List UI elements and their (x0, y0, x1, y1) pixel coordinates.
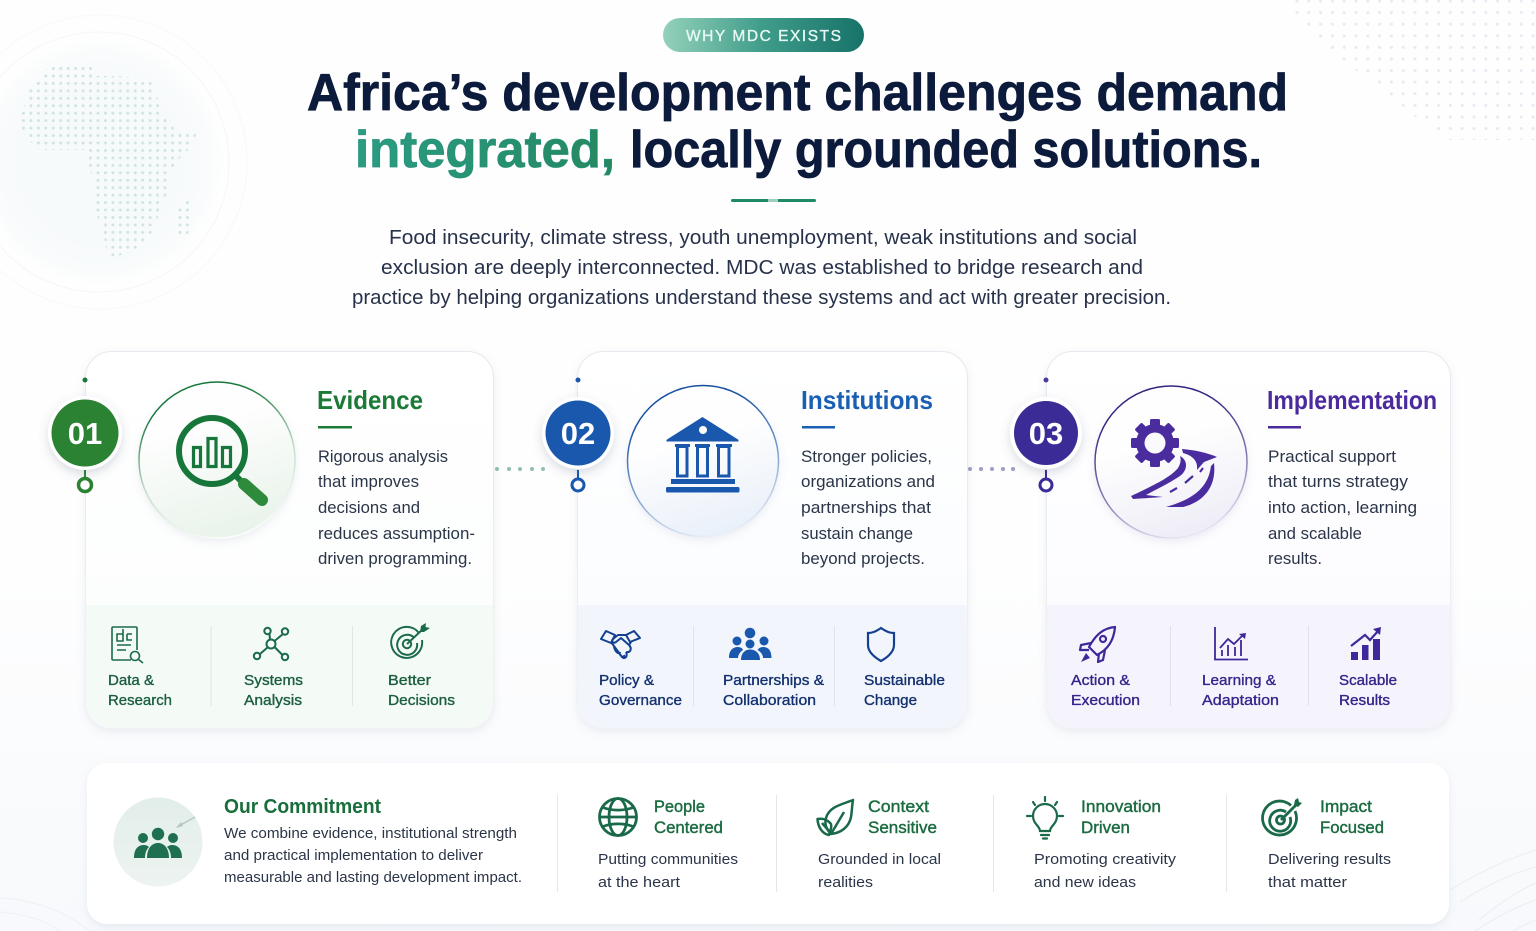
evidence description: decisions and (318, 498, 420, 517)
item: sustainable change: Change (864, 692, 917, 709)
step marker 02: 02 (561, 416, 595, 451)
step marker 03 (1010, 378, 1082, 491)
item: data and research: Research (108, 692, 172, 709)
intro paragraph: exclusion are deeply interconnected. MDC was established to bridge research and (381, 257, 1143, 279)
icon: community circle (114, 798, 202, 886)
value: innovation driven (1027, 797, 1177, 891)
divider (776, 795, 777, 892)
item: systems analysis: Analysis (244, 692, 302, 709)
item: sustainable change (864, 628, 945, 709)
panel: our commitment (87, 763, 1449, 924)
step marker 03: 03 (1029, 416, 1063, 451)
value: impact focused: Focused (1320, 819, 1384, 837)
decorative dotted Africa globe (0, 32, 230, 292)
value: innovation driven: Driven (1081, 819, 1130, 837)
heading rule (802, 426, 835, 428)
value: context sensitive (818, 798, 941, 891)
value: innovation driven: and new ideas (1034, 874, 1136, 891)
intro paragraph (352, 227, 1171, 309)
item: policy and governance (599, 631, 682, 709)
institutions description (801, 447, 935, 568)
intro paragraph: Food insecurity, climate stress, youth unemployment, weak institutions and social (389, 227, 1137, 249)
value: impact focused: Delivering results (1268, 851, 1391, 868)
heading: institutions: Institutions (801, 385, 933, 415)
divider (693, 626, 694, 706)
value: context sensitive: Context (868, 798, 929, 816)
icon: magnifier with bar chart (139, 382, 295, 538)
icon: target (1263, 801, 1297, 835)
item: action and execution: Execution (1071, 692, 1140, 709)
commitment description (224, 825, 522, 886)
item: learning and adaptation: Adaptation (1202, 692, 1279, 709)
decorative arcs bottom left (0, 898, 90, 931)
connector dots 1 to 2 (495, 467, 545, 471)
item: learning and adaptation (1202, 627, 1279, 709)
panel: institutions (542, 352, 968, 728)
title: locally grounded solutions. (630, 121, 1262, 179)
value: context sensitive: Sensitive (868, 819, 937, 837)
decorative arcs bottom right (1450, 850, 1536, 931)
item: scalable results: Scalable (1339, 672, 1397, 689)
evidence description: that improves (318, 472, 419, 491)
evidence description: Rigorous analysis (318, 447, 448, 466)
item: better decisions (388, 623, 455, 709)
item: action and execution: Action & (1071, 672, 1130, 689)
evidence description: reduces assumption- (318, 524, 475, 543)
evidence description (318, 447, 475, 568)
step marker 01 (48, 378, 122, 492)
divider (1170, 626, 1171, 706)
step marker 02 (542, 378, 614, 491)
icon: institution building (628, 386, 778, 536)
implementation description (1268, 447, 1417, 568)
intro paragraph: practice by helping organizations understand these systems and act with greater precision. (352, 287, 1171, 309)
title (307, 64, 1288, 179)
icon: light bulb (1027, 797, 1063, 838)
item: policy and governance: Policy & (599, 672, 654, 689)
divider (557, 795, 558, 892)
item: better decisions: Better (388, 672, 431, 689)
institutions description: organizations and (801, 472, 935, 491)
value: people centered: Putting communities (598, 851, 738, 868)
item: data and research: Data & (108, 672, 154, 689)
item: scalable results (1339, 627, 1397, 709)
divider (993, 795, 994, 892)
divider (352, 626, 353, 706)
value: innovation driven: Innovation (1081, 798, 1161, 816)
item: partnerships and collaboration (723, 628, 824, 709)
value: impact focused: that matter (1268, 874, 1347, 891)
institutions description: beyond projects. (801, 549, 925, 568)
heading rule (318, 426, 352, 428)
implementation description: Practical support (1268, 447, 1396, 466)
item: data and research (108, 627, 172, 709)
value: context sensitive: Grounded in local (818, 851, 941, 868)
heading: evidence: Evidence (317, 385, 423, 415)
institutions description: sustain change (801, 524, 913, 543)
value: people centered: People (654, 798, 705, 816)
panel: implementation (1010, 352, 1450, 728)
value: impact focused: Impact (1320, 798, 1372, 816)
value: people centered: Centered (654, 819, 723, 837)
item: partnerships and collaboration: Partnerships & (723, 672, 824, 689)
divider (210, 626, 212, 706)
divider (1226, 795, 1227, 892)
item: policy and governance: Governance (599, 692, 682, 709)
item: learning and adaptation: Learning & (1202, 672, 1276, 689)
implementation description: and scalable (1268, 524, 1362, 543)
panel: evidence (48, 352, 494, 728)
divider (1308, 626, 1309, 706)
eyebrow pill: WHY MDC EXISTS (686, 28, 841, 45)
item: action and execution (1071, 627, 1140, 709)
implementation description: that turns strategy (1268, 472, 1409, 491)
title: integrated, (355, 121, 615, 179)
item: sustainable change: Sustainable (864, 672, 945, 689)
institutions description: Stronger policies, (801, 447, 932, 466)
commitment heading: Our Commitment (224, 796, 381, 818)
commitment description: measurable and lasting development impact. (224, 869, 522, 886)
commitment description: We combine evidence, institutional strength (224, 825, 517, 842)
item: systems analysis (244, 628, 303, 709)
decorative dot field top right (1285, 0, 1536, 140)
item: better decisions: Decisions (388, 692, 455, 709)
item: scalable results: Results (1339, 692, 1390, 709)
title divider (731, 199, 816, 202)
icon: globe (600, 798, 636, 836)
icon: leaves (818, 800, 853, 835)
item: systems analysis: Systems (244, 672, 303, 689)
value: impact focused (1263, 798, 1391, 891)
implementation description: into action, learning (1268, 498, 1417, 517)
eyebrow pill (663, 18, 864, 52)
item: partnerships and collaboration: Collaboration (723, 692, 816, 709)
evidence description: driven programming. (318, 549, 472, 568)
divider (834, 626, 835, 706)
value: innovation driven: Promoting creativity (1034, 851, 1177, 868)
commitment description: and practical implementation to deliver (224, 847, 483, 864)
title: Africa’s development challenges demand (307, 64, 1288, 122)
implementation description: results. (1268, 549, 1322, 568)
step marker 01: 01 (68, 416, 102, 451)
heading rule (1268, 426, 1301, 428)
value: people centered (598, 798, 738, 891)
value: people centered: at the heart (598, 874, 681, 891)
icon: gear and road arrow (1095, 386, 1247, 538)
institutions description: partnerships that (801, 498, 931, 517)
heading: implementation: Implementation (1267, 385, 1437, 415)
connector dots 2 to 3 (968, 467, 1015, 471)
value: context sensitive: realities (818, 874, 873, 891)
